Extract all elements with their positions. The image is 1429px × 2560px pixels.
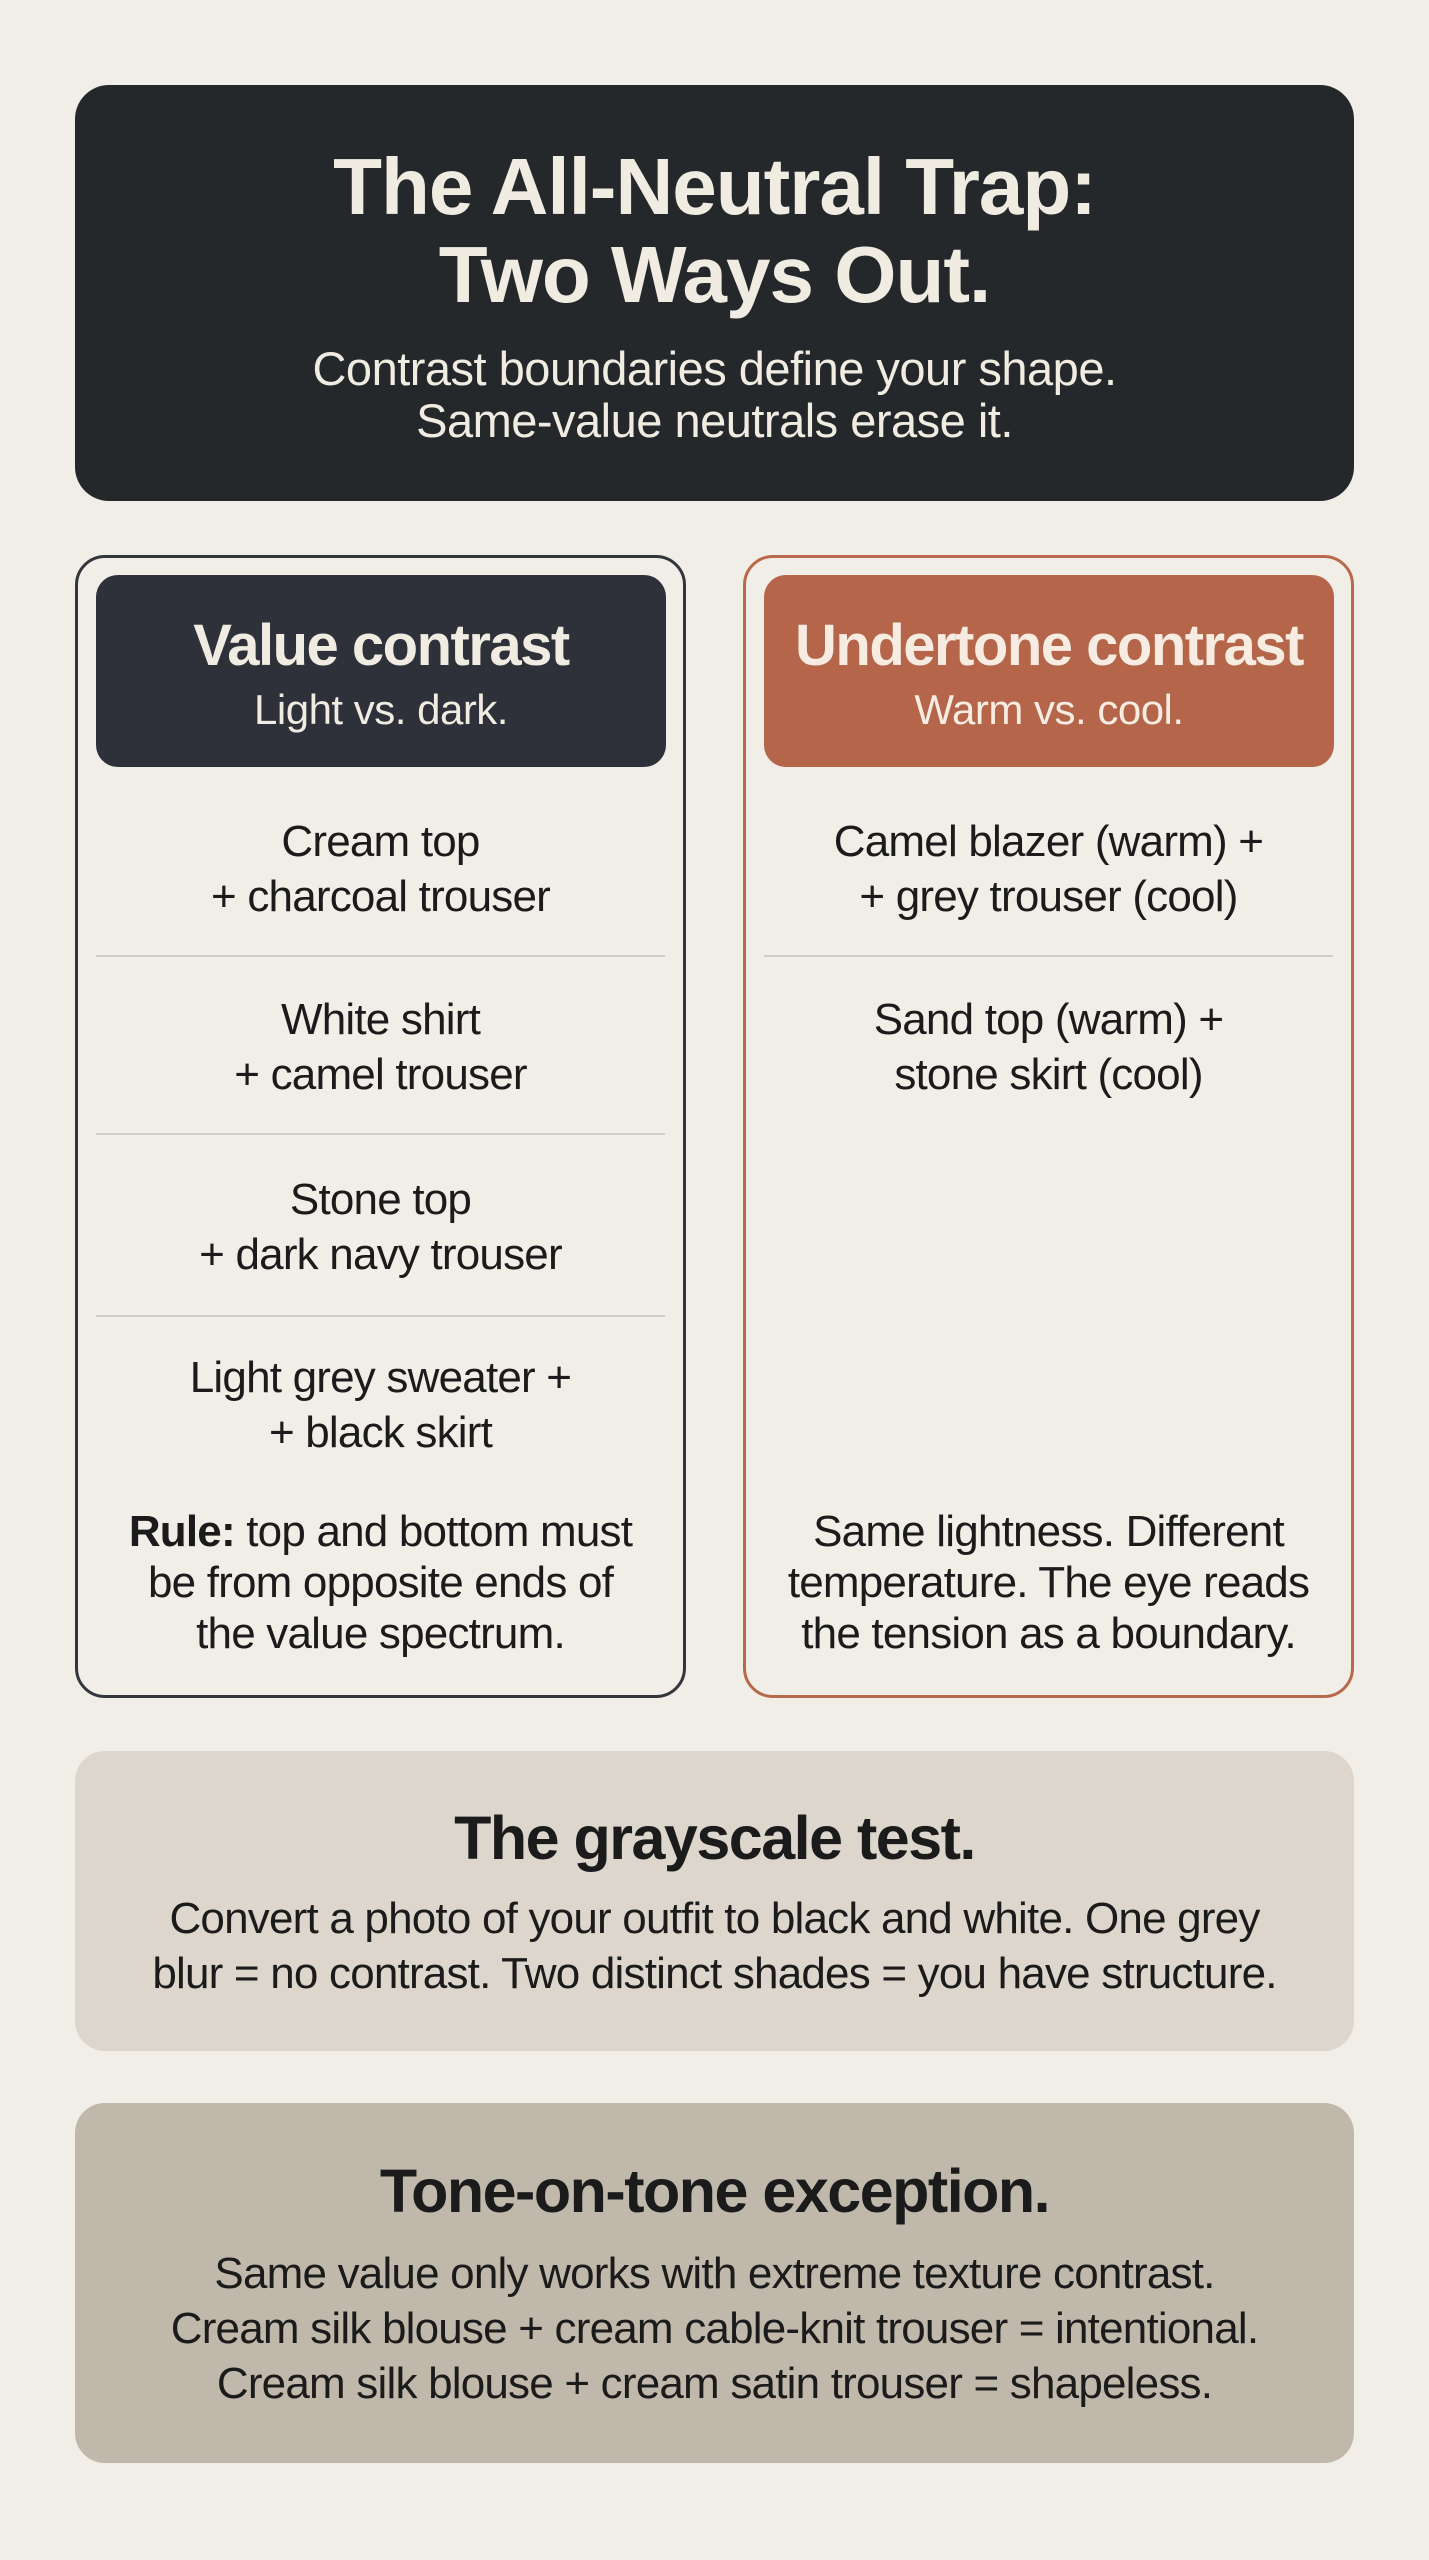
item 3: Stone top bbox=[290, 1175, 471, 1224]
explanation text bbox=[788, 1507, 1309, 1658]
rule text: Rule: top and bottom must bbox=[129, 1507, 632, 1556]
item 2 bbox=[874, 995, 1223, 1099]
item 1: Cream top bbox=[281, 817, 480, 866]
panel: undertone contrast bbox=[743, 555, 1354, 1698]
panel heading: undertone contrast bbox=[764, 575, 1334, 767]
panel: value contrast bbox=[75, 555, 686, 1698]
item 1 bbox=[834, 817, 1263, 921]
title: The All-Neutral Trap: bbox=[333, 142, 1096, 231]
subtitle: Same-value neutrals erase it. bbox=[416, 394, 1013, 447]
item 2: Sand top (warm) + bbox=[874, 995, 1223, 1044]
item 4: + black skirt bbox=[269, 1408, 492, 1457]
item 1: + charcoal trouser bbox=[211, 872, 550, 921]
rule text: be from opposite ends of bbox=[148, 1558, 613, 1607]
body text: Convert a photo of your outfit to black and white. One grey bbox=[169, 1894, 1260, 1943]
item 2: White shirt bbox=[281, 995, 480, 1044]
panel heading: value contrast bbox=[96, 575, 666, 767]
heading: The grayscale test. bbox=[454, 1804, 975, 1872]
body text: Cream silk blouse + cream satin trouser = shapeless. bbox=[217, 2359, 1212, 2408]
item 2: stone skirt (cool) bbox=[894, 1050, 1203, 1099]
panel heading: undertone contrast: Warm vs. cool. bbox=[914, 686, 1184, 733]
body text bbox=[171, 2249, 1258, 2408]
item 2 bbox=[234, 995, 527, 1099]
body text: Same value only works with extreme texture contrast. bbox=[214, 2249, 1215, 2298]
header panel bbox=[75, 85, 1354, 501]
panel heading: value contrast: Light vs. dark. bbox=[254, 686, 508, 733]
item 2: + camel trouser bbox=[234, 1050, 527, 1099]
body text: Cream silk blouse + cream cable-knit trouser = intentional. bbox=[171, 2304, 1258, 2353]
item 1 bbox=[211, 817, 550, 921]
panel: tone-on-tone exception bbox=[75, 2103, 1354, 2463]
item 3 bbox=[199, 1175, 562, 1279]
panel: grayscale test bbox=[75, 1751, 1354, 2051]
item 4 bbox=[190, 1353, 571, 1457]
subtitle bbox=[312, 342, 1117, 447]
explanation text: the tension as a boundary. bbox=[801, 1609, 1296, 1658]
rule text: the value spectrum. bbox=[196, 1609, 565, 1658]
item 4: Light grey sweater + bbox=[190, 1353, 571, 1402]
rule text bbox=[129, 1507, 633, 1658]
item 3: + dark navy trouser bbox=[199, 1230, 562, 1279]
heading: Tone-on-tone exception. bbox=[380, 2157, 1049, 2225]
explanation text: Same lightness. Different bbox=[813, 1507, 1284, 1556]
subtitle: Contrast boundaries define your shape. bbox=[312, 342, 1117, 395]
explanation text: temperature. The eye reads bbox=[788, 1558, 1309, 1607]
panel heading: value contrast: Value contrast bbox=[193, 613, 569, 678]
body text: blur = no contrast. Two distinct shades = you have structure. bbox=[152, 1949, 1277, 1998]
body text bbox=[152, 1894, 1277, 1998]
item 1: + grey trouser (cool) bbox=[859, 872, 1238, 921]
title bbox=[333, 142, 1096, 319]
item 1: Camel blazer (warm) + bbox=[834, 817, 1263, 866]
title: Two Ways Out. bbox=[439, 230, 990, 319]
panel heading: undertone contrast: Undertone contrast bbox=[795, 613, 1303, 678]
